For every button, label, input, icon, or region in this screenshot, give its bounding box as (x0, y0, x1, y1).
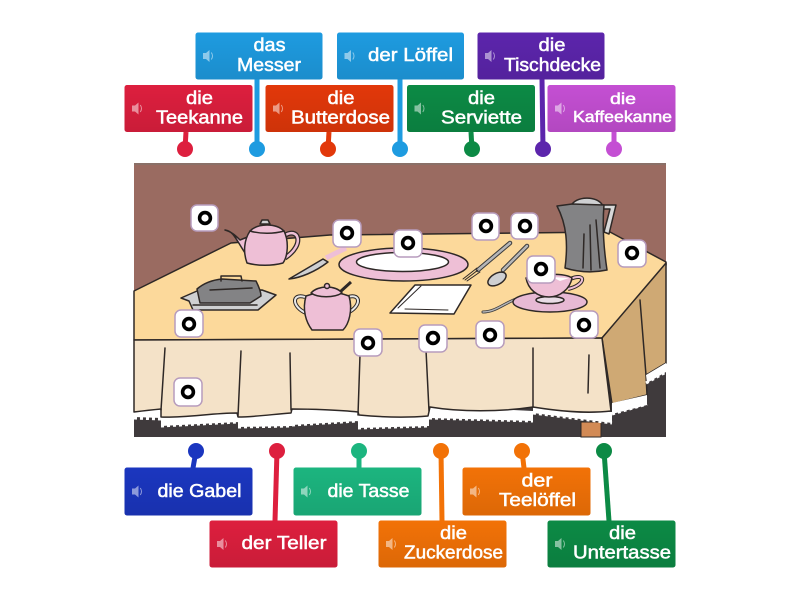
marker 10 (419, 325, 447, 352)
marker 7 (618, 240, 646, 267)
label: der Teelöffel: Teelöffel (499, 490, 576, 510)
marker 6 (527, 256, 555, 283)
label: die Kaffeekanne: Kaffeekanne (573, 109, 672, 126)
marker 2 (333, 220, 361, 247)
label: die Gabel (124, 443, 252, 516)
butter dish (181, 276, 276, 310)
label: der Löffel: der Löffel (368, 45, 453, 65)
label: die Tasse (294, 443, 422, 516)
marker 12 (570, 311, 598, 338)
label: die Gabel: die Gabel (158, 481, 242, 501)
teaspoon (483, 299, 516, 312)
marker 11 (476, 321, 504, 348)
marker 3 (394, 230, 422, 257)
marker 1 (191, 205, 218, 231)
marker 5 (511, 213, 538, 239)
fork (463, 243, 510, 281)
illustration: set table (134, 163, 666, 437)
label: das Messer: Messer (237, 55, 301, 75)
spoon (486, 246, 527, 289)
label: die Zuckerdose: Zuckerdose (404, 542, 503, 562)
label: die Teekanne: die (186, 88, 213, 108)
label: die Butterdose: Butterdose (291, 108, 390, 128)
label: das Messer (196, 32, 322, 157)
cup (526, 274, 582, 297)
table top (134, 232, 666, 340)
marker 8 (175, 310, 203, 337)
label: die Untertasse: die (609, 523, 636, 543)
label: die Butterdose (266, 85, 394, 157)
saucer (513, 292, 587, 312)
marker 4 (472, 213, 499, 240)
label: die Untertasse (548, 443, 676, 568)
label: die Serviette: die (468, 88, 495, 108)
label: die Tischdecke: die (538, 35, 566, 55)
knife (289, 248, 346, 279)
teapot (225, 220, 298, 265)
label: der Teelöffel: der (522, 470, 553, 490)
label: der Teelöffel (462, 443, 590, 516)
sugar bowl (295, 282, 358, 330)
label: die Tasse: die Tasse (328, 481, 410, 501)
label: die Kaffeekanne (548, 85, 676, 157)
marker 13 (174, 378, 202, 406)
label: der Löffel (337, 32, 464, 157)
wall (134, 163, 666, 300)
plate (339, 248, 468, 281)
marker 9 (354, 329, 382, 356)
label: die Teekanne (124, 85, 252, 157)
cloth side panel (602, 263, 666, 404)
label: die Serviette (407, 85, 535, 157)
label: das Messer: das (254, 35, 286, 55)
label: die Untertasse: Untertasse (573, 542, 671, 562)
label: die Tischdecke (478, 32, 604, 157)
label: der Teller: der Teller (242, 533, 326, 553)
label: die Zuckerdose (378, 443, 506, 568)
label: die Teekanne: Teekanne (156, 108, 243, 128)
label: die Butterdose: die (328, 88, 354, 108)
table leg (581, 422, 601, 437)
label: die Zuckerdose: die (440, 523, 467, 543)
label: der Teller (210, 443, 338, 568)
label: die Serviette: Serviette (441, 108, 522, 128)
cloth lace (134, 406, 612, 428)
label: die Kaffeekanne: die (610, 91, 636, 108)
fold lines (161, 348, 589, 416)
side lace (612, 363, 666, 414)
napkin (390, 285, 471, 314)
label: die Tischdecke: Tischdecke (504, 55, 601, 75)
cloth front (134, 338, 611, 417)
coffee pot (557, 198, 616, 272)
